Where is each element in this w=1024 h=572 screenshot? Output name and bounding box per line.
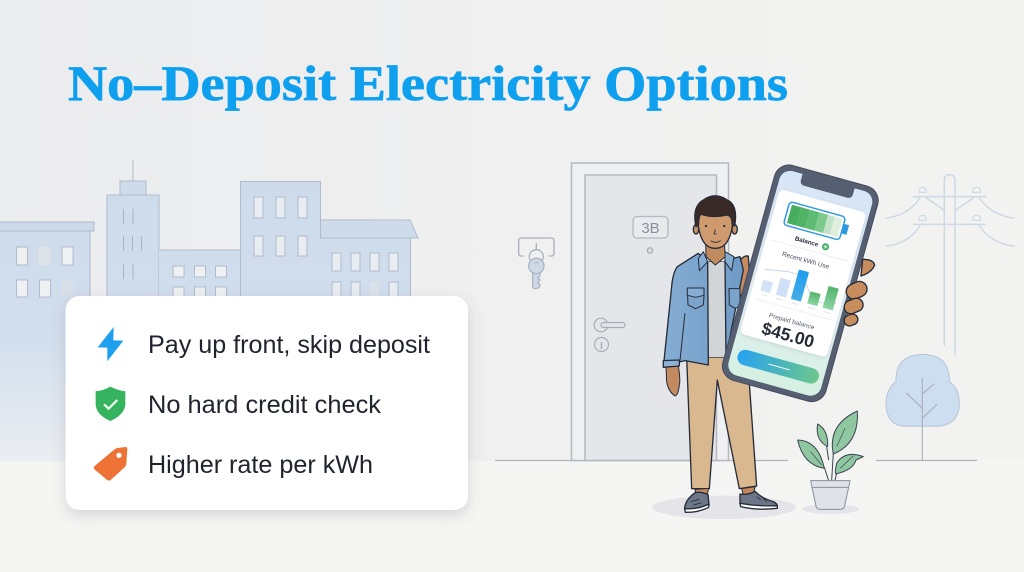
- person: upper body: [663, 196, 750, 396]
- jacket pockets: [687, 288, 704, 309]
- app card: [740, 189, 867, 357]
- item: higher rate: Higher rate per kWh: [148, 451, 373, 479]
- trousers: [687, 357, 757, 489]
- building: tower with antenna: [107, 160, 159, 461]
- building: left block: [0, 222, 94, 461]
- t-shirt: [706, 262, 727, 357]
- person: legs and shoes: [685, 357, 777, 512]
- hair: [695, 196, 736, 227]
- icon: orange price tag: [94, 447, 127, 481]
- building: tall block: [240, 181, 320, 461]
- neck: [706, 242, 725, 265]
- icon: lightning bolt: [98, 327, 123, 361]
- item: pay up front: Pay up front, skip deposit: [148, 331, 430, 359]
- balance label: Balance: [794, 235, 820, 249]
- icon: green shield: [96, 387, 125, 421]
- ears: [693, 225, 699, 234]
- door peephole: [647, 248, 653, 253]
- prepaid label: Prepaid balance: [768, 312, 815, 332]
- jacket cuff: [663, 360, 679, 367]
- plant stems: [824, 447, 837, 481]
- item: no credit check: No hard credit check: [148, 391, 381, 419]
- door: [572, 163, 728, 460]
- tree: [886, 354, 959, 461]
- power pole: [885, 175, 1015, 355]
- phone screen: [726, 168, 875, 398]
- hanging hand: [666, 366, 680, 396]
- face: [697, 210, 733, 248]
- chart heading: Recent kWh Use: [781, 251, 830, 271]
- plant pot: [811, 481, 850, 509]
- left shoe: [685, 492, 709, 511]
- illustration: city skyline: [0, 160, 418, 461]
- jacket: [664, 253, 743, 365]
- phone body: [719, 162, 882, 405]
- icon: key holder: [519, 238, 554, 289]
- usage bar chart: [758, 261, 842, 314]
- balance status dot: [821, 242, 830, 251]
- door number plate: [633, 216, 668, 238]
- plant leaves: [798, 440, 824, 468]
- phone notch: [800, 173, 855, 199]
- battery: [783, 202, 851, 242]
- floor line: [495, 460, 977, 462]
- prepaid amount: $45.00: [760, 318, 817, 352]
- door number plate: 3B: [641, 220, 660, 237]
- right shoe: [740, 491, 777, 507]
- app button: [736, 348, 821, 385]
- ground shadows: [652, 496, 859, 519]
- eyes and smile: [705, 225, 707, 227]
- building: right block with roof: [320, 220, 418, 461]
- panel: key points card: [66, 296, 468, 510]
- phone: [719, 162, 882, 405]
- plant: [798, 411, 863, 509]
- door handle and lock: [594, 318, 625, 352]
- raised arm: [738, 256, 750, 297]
- collar: [698, 252, 734, 271]
- person: fingers gripping phone: [842, 259, 875, 327]
- title: No–Deposit Electricity Options: [68, 55, 788, 111]
- building: low middle block: [159, 250, 240, 461]
